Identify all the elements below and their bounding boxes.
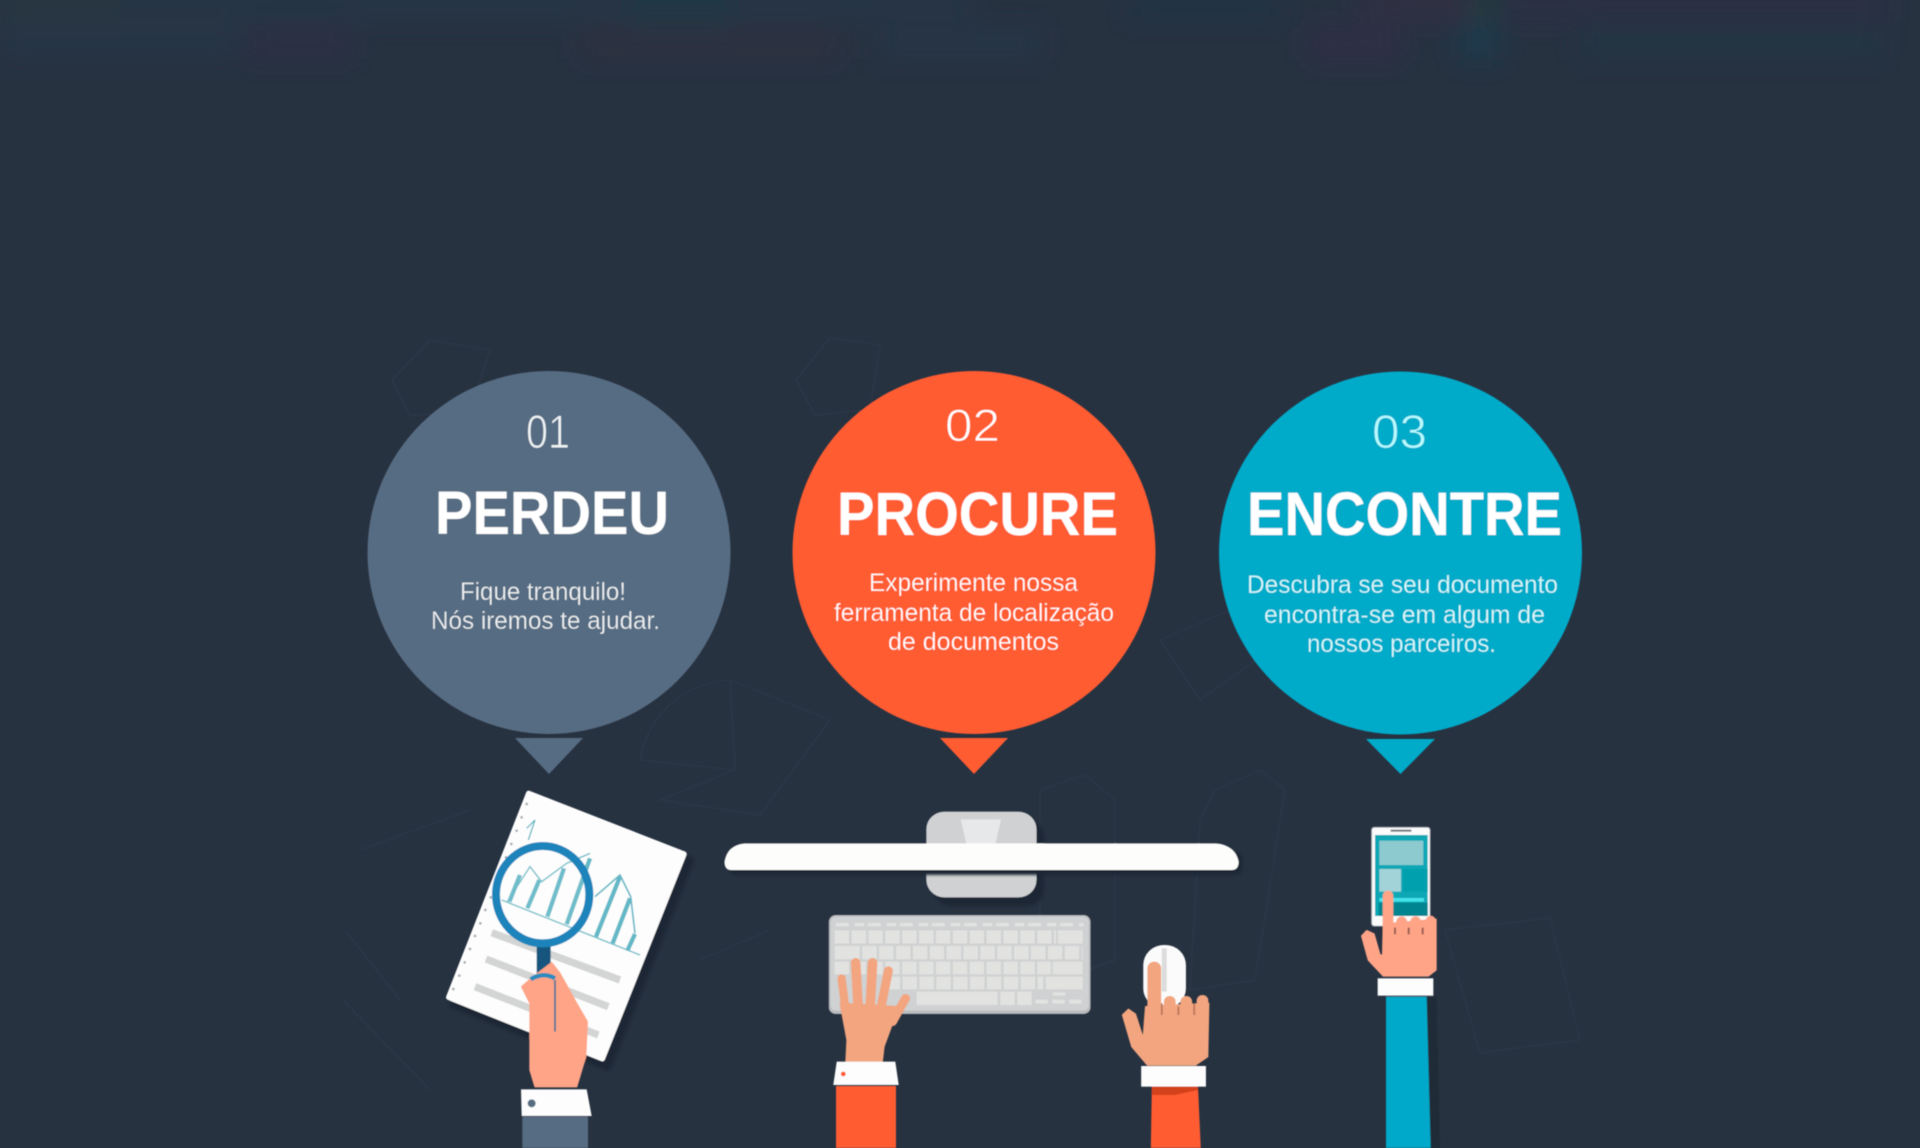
right shirt cuff [1141, 1066, 1206, 1087]
text: step 2 description: de documentos [888, 628, 1059, 656]
magnifier lens [496, 846, 589, 943]
heading: encontre: ENCONTRE [1247, 480, 1562, 548]
shirt cuff [521, 1089, 592, 1116]
left shirt cuff [833, 1062, 899, 1085]
text: step 2 description [834, 569, 1114, 656]
pointer: step 3 [1366, 739, 1435, 774]
document chart [502, 820, 640, 955]
illustration: computer with keyboard and mouse [724, 812, 1242, 1148]
hand on phone [1362, 896, 1436, 976]
text: step 2 description: ferramenta de localização [834, 599, 1114, 627]
phone screen [1375, 835, 1428, 916]
circle: step 3 [1219, 372, 1582, 734]
document page [449, 793, 684, 1059]
phone body [1372, 827, 1430, 926]
background doodles [343, 338, 1580, 1090]
text: step 1 description [431, 578, 660, 635]
sleeve shadow [1427, 997, 1440, 1148]
pointer: step 1 [515, 738, 583, 774]
text: step 3 description [1247, 571, 1558, 658]
monitor bar shadow [729, 852, 1242, 875]
text: step 3 description: encontra-se em algum de [1264, 601, 1545, 629]
magnifier handle [537, 945, 551, 973]
text: step 1 description: Nós iremos te ajudar. [431, 607, 660, 635]
circle: step 1 [368, 371, 730, 734]
panel: step 3 encontre [1219, 372, 1582, 774]
text: step 3 description: Descubra se seu documento [1247, 571, 1558, 599]
sleeve [1386, 997, 1431, 1148]
number: 01: 01 [526, 405, 570, 458]
circle: step 2 [792, 371, 1156, 734]
sleeve [522, 1117, 588, 1148]
keyboard [829, 915, 1091, 1014]
text: step 3 description: nossos parceiros. [1307, 630, 1496, 658]
left hand on keyboard [840, 963, 906, 1062]
right hand on mouse [1123, 968, 1209, 1065]
hand holding magnifier [522, 963, 587, 1087]
mouse [1143, 945, 1186, 1008]
text: step 1 description: Fique tranquilo! [460, 578, 626, 606]
monitor stand shadow [934, 820, 1044, 906]
number: 02: 02 [945, 400, 1000, 451]
document shadow [452, 798, 692, 1068]
text: step 2 description: Experimente nossa [869, 569, 1078, 597]
number: 03: 03 [1372, 405, 1427, 458]
panel: step 2 procure [792, 371, 1156, 774]
left sleeve [836, 1086, 896, 1148]
panel: step 1 perdeu [368, 371, 730, 774]
monitor bar [724, 843, 1239, 870]
illustration: hand using smartphone [1362, 827, 1440, 1148]
document text lines [475, 933, 620, 1035]
right sleeve [1151, 1087, 1201, 1148]
illustration: hand with magnifier over document [449, 793, 692, 1148]
monitor stand [926, 812, 1036, 897]
heading: procure: PROCURE [837, 480, 1118, 548]
pointer: step 2 [940, 738, 1008, 774]
shirt cuff [1378, 978, 1433, 996]
heading: perdeu: PERDEU [435, 479, 669, 547]
